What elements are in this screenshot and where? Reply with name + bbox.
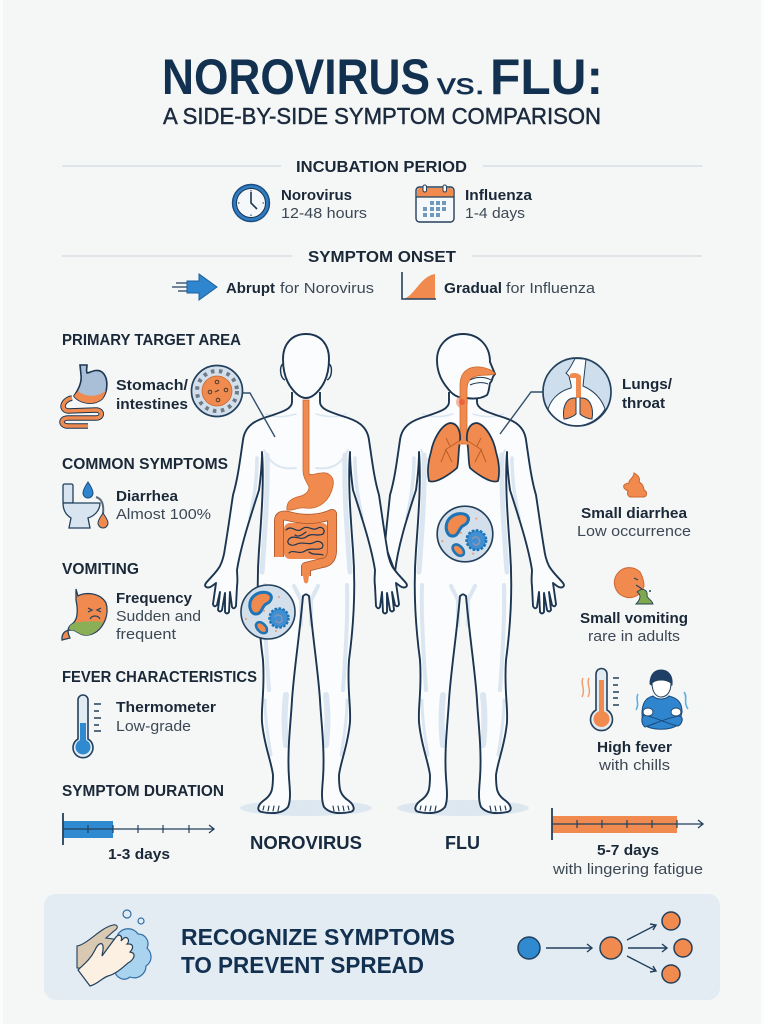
icon: small vomiting xyxy=(614,568,653,604)
banner text xyxy=(181,924,455,978)
text: flu duration: with lingering fatigue xyxy=(552,861,703,878)
text: high fever xyxy=(597,739,672,774)
target text: lungs xyxy=(622,376,673,412)
icon: stomach and intestines xyxy=(62,365,107,426)
gradual text: Gradual xyxy=(444,280,502,297)
text: small vomiting xyxy=(580,610,688,645)
target text: stomach xyxy=(116,377,189,413)
abrupt text: Abrupt xyxy=(226,280,275,297)
label: flu: FLU xyxy=(445,833,480,853)
flu respiratory tract xyxy=(456,367,495,444)
norovirus cell magnifier xyxy=(241,585,295,639)
banner text: TO PREVENT SPREAD xyxy=(181,952,424,978)
label: norovirus: NOROVIRUS xyxy=(250,833,362,853)
text: small vomiting: rare in adults xyxy=(588,628,680,645)
title: vs. xyxy=(437,68,485,101)
title xyxy=(162,49,603,105)
target text: stomach: intestines xyxy=(116,396,188,413)
heading: symptom duration: SYMPTOM DURATION xyxy=(62,783,224,800)
target text: lungs: throat xyxy=(622,395,665,412)
heading: primary target area: PRIMARY TARGET AREA xyxy=(62,332,241,349)
icon: small diarrhea xyxy=(624,473,647,497)
icon: spread diagram xyxy=(518,912,692,983)
chart: norovirus duration: 1-3 days xyxy=(108,846,170,863)
symptom text: vomiting xyxy=(116,590,201,643)
right callout line xyxy=(500,392,543,434)
icon: washing hands xyxy=(77,910,151,986)
panel: bottom banner xyxy=(44,894,720,1000)
symptom text: fever: Thermometer xyxy=(116,699,216,716)
norovirus digestive tract xyxy=(279,400,333,584)
icon: virus circle xyxy=(192,366,242,416)
icon: sick stomach xyxy=(62,589,107,640)
text: small diarrhea: Small diarrhea xyxy=(581,505,688,522)
symptom text: vomiting: Sudden and xyxy=(116,608,201,625)
icon: gradual curve xyxy=(402,272,436,299)
gradual text: for Influenza xyxy=(506,280,596,297)
text: flu duration: 5-7 days xyxy=(597,842,659,859)
incubation norovirus text: 12-48 hours xyxy=(281,205,367,222)
heading: incubation period: INCUBATION PERIOD xyxy=(296,159,467,176)
symptom text: fever xyxy=(116,699,216,735)
text: high fever: High fever xyxy=(597,739,672,756)
icon: clock xyxy=(232,184,270,222)
incubation influenza text: Influenza xyxy=(465,187,533,204)
symptom text: diarrhea xyxy=(116,488,211,523)
incubation norovirus text xyxy=(281,187,367,222)
text: flu duration xyxy=(552,842,703,878)
heading: vomiting: VOMITING xyxy=(62,561,139,578)
heading: fever characteristics: FEVER CHARACTERISTICS xyxy=(62,669,257,686)
gradual text xyxy=(444,280,596,297)
icon: low thermometer xyxy=(73,695,101,758)
icon: high thermometer xyxy=(582,668,619,731)
subtitle: A SIDE-BY-SIDE SYMPTOM COMPARISON xyxy=(163,103,601,129)
symptom text: diarrhea: Almost 100% xyxy=(116,506,211,523)
target text: stomach: Stomach/ xyxy=(116,377,189,394)
icon: calendar xyxy=(416,185,454,222)
heading: symptom onset: SYMPTOM ONSET xyxy=(308,249,456,266)
text: high fever: with chills xyxy=(598,757,670,774)
text: small vomiting: Small vomiting xyxy=(580,610,688,627)
chart: flu duration xyxy=(552,808,703,840)
symptom text: fever: Low-grade xyxy=(116,718,191,735)
target text: lungs: Lungs/ xyxy=(622,376,673,393)
incubation influenza text: 1-4 days xyxy=(465,205,525,222)
icon: chills person xyxy=(636,670,688,729)
symptom text: vomiting: Frequency xyxy=(116,590,193,607)
symptom text: diarrhea: Diarrhea xyxy=(116,488,179,505)
icon: abrupt arrow xyxy=(172,274,217,300)
text: small diarrhea xyxy=(577,505,691,540)
symptom text: vomiting: frequent xyxy=(116,626,177,643)
icon: toilet xyxy=(63,482,108,528)
title: NOROVIRUS xyxy=(162,49,430,105)
flu cell magnifier xyxy=(437,506,493,562)
flu lungs xyxy=(428,423,499,482)
incubation norovirus text: Norovirus xyxy=(281,187,352,204)
icon: lungs and throat circle xyxy=(543,358,611,426)
left callout line xyxy=(243,393,275,437)
norovirus body xyxy=(205,334,407,813)
abrupt text xyxy=(226,280,374,297)
foot shadows xyxy=(240,800,529,816)
flu body xyxy=(385,334,564,813)
heading: common symptoms: COMMON SYMPTOMS xyxy=(62,456,228,473)
banner text: RECOGNIZE SYMPTOMS xyxy=(181,924,455,950)
incubation influenza text xyxy=(465,187,533,222)
title: FLU: xyxy=(490,49,603,105)
abrupt text: for Norovirus xyxy=(280,280,374,297)
chart: norovirus duration xyxy=(63,813,214,863)
text: small diarrhea: Low occurrence xyxy=(577,523,691,540)
